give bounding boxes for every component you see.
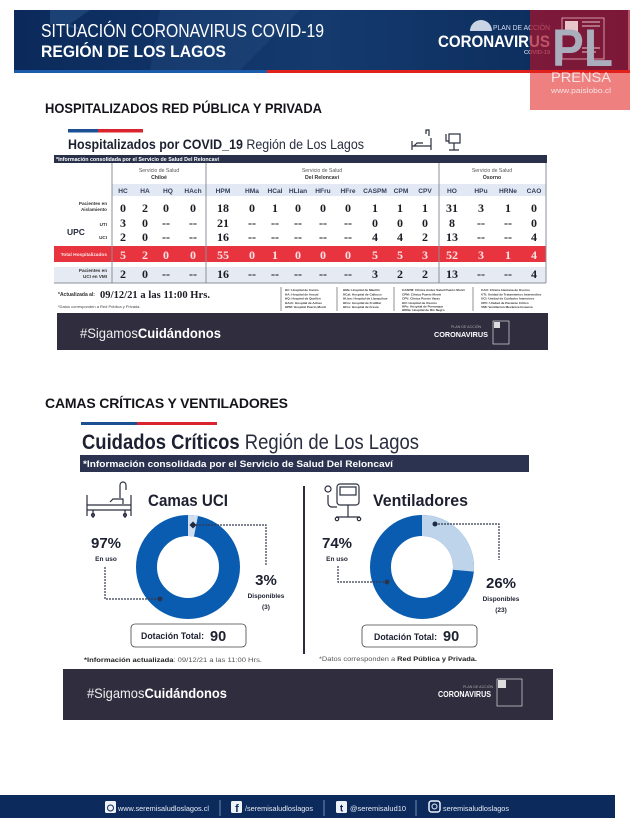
row: UCI: 4 xyxy=(372,230,378,244)
service names: Servicio de Salud xyxy=(472,168,512,174)
column codes: HO xyxy=(447,188,457,195)
row: UTI: -- xyxy=(271,216,279,230)
row: aislamiento: 0 xyxy=(320,201,326,215)
banner: Sigamos Cuidándonos (upper): PLAN DE ACCIÓN xyxy=(451,324,482,329)
footer link: twitter: @seremisalud10 xyxy=(350,804,406,813)
row: UCI: -- xyxy=(319,230,327,244)
row labels xyxy=(79,201,107,240)
row: total: 3 xyxy=(422,248,428,262)
row: VMI: -- xyxy=(271,267,279,281)
column codes: HLlan xyxy=(289,188,307,195)
flag bar xyxy=(81,422,217,425)
icon: ventilator xyxy=(325,484,361,521)
panel title: Cuidados Críticos Región de Los Lagos xyxy=(82,431,419,454)
VMI row background xyxy=(54,267,546,282)
row: UTI: -- xyxy=(477,216,485,230)
icon: ventilator xyxy=(446,134,460,150)
banner: Sigamos Cuidándonos (upper): #SigamosCuidándonos xyxy=(80,326,221,341)
stat: 97 en uso xyxy=(91,535,121,563)
legend of abbreviations: HPu: Hospital de Purranque xyxy=(402,304,443,308)
legend of abbreviations: HCal: Hospital de Calbuco xyxy=(343,292,382,296)
footer link: facebook xyxy=(231,801,313,815)
stat: 74 en uso xyxy=(322,535,352,563)
row: total: 5 xyxy=(372,248,378,262)
row: total: 52 xyxy=(446,248,458,262)
row: aislamiento: 0 xyxy=(120,201,126,215)
icon: hospital bed xyxy=(87,482,131,518)
banner: Sigamos Cuidándonos (lower): PLAN DE ACCIÓN xyxy=(463,684,494,689)
row: VMI: -- xyxy=(162,267,170,281)
box: dotacion total right: Dotación Total: xyxy=(374,632,437,642)
header logo: COVID-19 xyxy=(524,50,550,56)
legend of abbreviations: HFru: Hospital de Frutillar xyxy=(343,301,382,305)
row: UTI: 3 xyxy=(120,216,126,230)
legend of abbreviations: CAO: Clínica Alemana de Osorno xyxy=(481,288,530,292)
footer link: twitter xyxy=(336,801,406,814)
row: UTI: 0 xyxy=(142,216,148,230)
heading: hospitalizados: HOSPITALIZADOS RED PÚBLICA Y PRIVADA xyxy=(45,99,322,116)
row: total: 5 xyxy=(120,248,126,262)
table title: Hospitalizados por COVID_19 Región de Los Lagos xyxy=(68,136,364,152)
row: UTI: -- xyxy=(248,216,256,230)
UPC label: UPC xyxy=(67,227,85,237)
header logo xyxy=(438,20,550,56)
row: UTI: 0 xyxy=(372,216,378,230)
row: aislamiento: 0 xyxy=(190,201,196,215)
panel: cuidados criticos xyxy=(80,422,529,664)
row: UTI: 8 xyxy=(449,216,455,230)
row: UCI: -- xyxy=(344,230,352,244)
icon: bed xyxy=(412,130,431,150)
stat: 97 en uso: En uso xyxy=(95,556,117,563)
header row background xyxy=(112,184,546,196)
row: UTI: -- xyxy=(162,216,170,230)
row: UCI xyxy=(120,230,537,244)
service names: Servicio de Salud xyxy=(139,168,179,174)
banner: Sigamos Cuidándonos (lower) xyxy=(63,669,553,720)
banner: Sigamos Cuidándonos (lower): #SigamosCuidándonos xyxy=(87,685,227,701)
vertical divider xyxy=(303,486,305,654)
column codes: CAO xyxy=(527,188,541,195)
footer link: facebook: /seremisaludloslagos xyxy=(245,804,313,813)
column codes: HQ xyxy=(163,188,173,195)
row: VMI: 2 xyxy=(422,267,428,281)
footer link: web: www.seremisaludloslagos.cl xyxy=(117,804,209,813)
legend of abbreviations: HA: Hospital de Ancud xyxy=(285,292,319,296)
header banner xyxy=(14,10,628,73)
row: total: 0 xyxy=(295,248,301,262)
row: aislamiento: 0 xyxy=(531,201,537,215)
info bar: *Información consolidada por el Servicio de Salud Del Reloncaví xyxy=(83,459,394,469)
row: VMI: -- xyxy=(344,267,352,281)
row: VMI: 13 xyxy=(446,267,458,281)
row: VMI: 2 xyxy=(397,267,403,281)
row: UCI: -- xyxy=(477,230,485,244)
column codes: HAch xyxy=(184,188,202,195)
table column dividers xyxy=(54,163,546,283)
info bar xyxy=(54,155,547,163)
row labels: UCI xyxy=(99,235,107,240)
row: VMI: 3 xyxy=(372,267,378,281)
update stamp: *Datos corresponden a Red Pública y Privada. xyxy=(58,304,140,309)
row: aislamiento: 0 xyxy=(163,201,169,215)
legend of abbreviations: VMI: Ventilación Mecánica Invasiva xyxy=(481,305,533,309)
panel: hospitalizados table xyxy=(54,129,547,312)
row: total: 0 xyxy=(320,248,326,262)
legend of abbreviations: UCI: Unidad de Cuidados Intensivos xyxy=(481,297,535,301)
legend of abbreviations: HFre: Hospital de Fresia xyxy=(343,305,379,309)
box: dotacion total left: 90 xyxy=(210,629,226,645)
box: dotacion total left xyxy=(131,624,246,647)
row: total: 4 xyxy=(531,248,537,262)
column codes: CASPM xyxy=(363,188,387,195)
row: aislamiento xyxy=(120,201,537,215)
column codes: HPu xyxy=(474,188,488,195)
service names: Chiloé xyxy=(151,175,167,181)
banner: Sigamos Cuidándonos (upper) xyxy=(57,313,548,350)
row: UCI: 16 xyxy=(217,230,229,244)
column codes: HFru xyxy=(315,188,331,195)
column codes: HFre xyxy=(340,188,356,195)
row: aislamiento: 0 xyxy=(295,201,301,215)
row: total: 0 xyxy=(163,248,169,262)
legend of abbreviations xyxy=(281,287,542,312)
legend of abbreviations: HC: Hospital de Castro xyxy=(285,288,319,292)
column codes: HPM xyxy=(216,188,231,195)
banner: Sigamos Cuidándonos (upper): CORONAVIRUS xyxy=(434,330,488,339)
stat: 97 en uso: 97% xyxy=(91,535,121,552)
row: aislamiento: 1 xyxy=(372,201,378,215)
watermark: PL Prensa xyxy=(530,10,630,110)
row: total: 0 xyxy=(345,248,351,262)
column codes: CPV xyxy=(418,188,432,195)
legend of abbreviations: HO: Hospital de Osorno xyxy=(402,301,437,305)
row: aislamiento: 1 xyxy=(272,201,278,215)
row: aislamiento: 1 xyxy=(505,201,511,215)
column codes xyxy=(118,188,541,195)
row: UTI: -- xyxy=(294,216,302,230)
row: UCI: -- xyxy=(294,230,302,244)
total row label: Total Hospitalizados xyxy=(61,252,107,258)
header logo: PLAN DE ACCIÓN xyxy=(493,23,550,32)
row: VMI: -- xyxy=(189,267,197,281)
row: total: 0 xyxy=(249,248,255,262)
box: dotacion total right xyxy=(362,625,477,647)
legend of abbreviations: HAch: Hospital de Achao xyxy=(285,301,322,305)
row: UCI: 2 xyxy=(422,230,428,244)
row: aislamiento: 0 xyxy=(249,201,255,215)
stat: 26 disponibles: Disponibles xyxy=(483,596,520,603)
update stamp xyxy=(58,290,210,309)
watermark: PL Prensa: www.paislobo.cl xyxy=(550,86,611,95)
row: aislamiento: 1 xyxy=(397,201,403,215)
VMI row label: UCI en VMI xyxy=(83,274,107,279)
row: VMI: -- xyxy=(504,267,512,281)
footer link: instagram xyxy=(429,801,509,813)
row: UCI: -- xyxy=(248,230,256,244)
row: VMI: 4 xyxy=(531,267,537,281)
leader: uso right xyxy=(338,566,390,584)
service names: Del Reloncaví xyxy=(305,175,340,181)
row: UTI: 21 xyxy=(217,216,229,230)
legend of abbreviations: HPM: Hospital Puerto Montt xyxy=(285,305,326,309)
row: UCI: -- xyxy=(189,230,197,244)
stat: 3 disponibles: (3) xyxy=(262,604,270,611)
column codes: HRNe xyxy=(499,188,517,195)
label: camas UCI: Camas UCI xyxy=(148,491,228,510)
row: UCI: -- xyxy=(271,230,279,244)
total row background xyxy=(54,246,546,262)
stat: 26 disponibles: (23) xyxy=(495,607,507,614)
row: VMI: 0 xyxy=(142,267,148,281)
stat: 3 disponibles: Disponibles xyxy=(248,593,285,600)
header title: REGIÓN DE LOS LAGOS xyxy=(41,42,226,61)
row: UTI: 0 xyxy=(397,216,403,230)
footer link: twitter: t xyxy=(340,804,344,814)
row: aislamiento: 1 xyxy=(422,201,428,215)
banner: Sigamos Cuidándonos (lower): CORONAVIRUS xyxy=(438,690,491,699)
row: UCI: 2 xyxy=(120,230,126,244)
update stamp: 09/12/21 a las 11:00 Hrs. xyxy=(100,290,210,301)
row: total xyxy=(120,248,537,262)
box: dotacion total right: 90 xyxy=(443,629,459,645)
column codes: HC xyxy=(118,188,128,195)
watermark: PL Prensa: PL xyxy=(552,19,613,78)
leader: disponibles right xyxy=(432,522,499,560)
row: VMI: 16 xyxy=(217,267,229,281)
row: UTI xyxy=(120,216,537,230)
note: datos: *Datos corresponden a Red Pública y Privada. xyxy=(319,656,477,663)
row: UTI: -- xyxy=(189,216,197,230)
stat: 26 disponibles: 26% xyxy=(486,575,516,592)
row labels: UTI xyxy=(100,222,107,227)
heading: camas criticas: CAMAS CRÍTICAS Y VENTILADORES xyxy=(45,395,288,411)
stat: 74 en uso: 74% xyxy=(322,535,352,552)
stat: 3 disponibles: 3% xyxy=(255,572,277,589)
row: UTI: -- xyxy=(344,216,352,230)
header title xyxy=(41,20,324,61)
row labels: Aislamiento xyxy=(81,207,107,212)
flag bar xyxy=(68,129,143,132)
footer link: facebook: f xyxy=(235,803,239,815)
row: total: 5 xyxy=(397,248,403,262)
box: dotacion total left: Dotación Total: xyxy=(141,631,204,641)
legend of abbreviations: CPV: Clínica Puerto Varas xyxy=(402,297,440,301)
column codes: CPM xyxy=(394,188,409,195)
update stamp: *Actualizada al: xyxy=(58,292,95,298)
row: UTI: 0 xyxy=(422,216,428,230)
row: aislamiento: 0 xyxy=(345,201,351,215)
legend of abbreviations: HLlan: Hospital de Llanquihue xyxy=(343,297,388,301)
row: UTI: -- xyxy=(504,216,512,230)
watermark: PL Prensa: PRENSA xyxy=(551,69,612,85)
legend of abbreviations: HMa: Hospital de Maullín xyxy=(343,288,380,292)
VMI row label: Pacientes en xyxy=(79,268,107,273)
stat: 3 disponibles xyxy=(248,572,285,611)
row: aislamiento: 31 xyxy=(446,201,458,215)
row labels: Pacientes en xyxy=(79,201,107,206)
header title: SITUACIÓN CORONAVIRUS COVID-19 xyxy=(41,20,324,41)
legend of abbreviations: HRNe: Hospital de Río Negro xyxy=(402,308,445,312)
note: informacion actualizada: *Información actualizada : 09/12/21 a las 11:00 Hrs. xyxy=(84,657,262,664)
row: UCI: -- xyxy=(162,230,170,244)
legend of abbreviations: UPC: Unidad de Paciente Crítico xyxy=(481,301,529,305)
label: ventiladores: Ventiladores xyxy=(373,491,468,510)
footer link: instagram: seremisaludloslagos xyxy=(443,804,509,813)
row: VMI xyxy=(120,267,537,281)
row: total: 1 xyxy=(505,248,511,262)
row: UCI: 13 xyxy=(446,230,458,244)
row: total: 3 xyxy=(478,248,484,262)
row: VMI: 2 xyxy=(120,267,126,281)
row: aislamiento: 3 xyxy=(478,201,484,215)
VMI row label xyxy=(79,268,107,279)
info bar: *Información consolidada por el Servicio de Salud Del Reloncaví xyxy=(56,157,220,163)
donut: ventiladores xyxy=(380,526,464,608)
row: UCI: 0 xyxy=(142,230,148,244)
service names: Osorno xyxy=(483,175,501,181)
row: total: 55 xyxy=(217,248,229,262)
row: total: 0 xyxy=(190,248,196,262)
row: UTI: 0 xyxy=(531,216,537,230)
row: VMI: -- xyxy=(248,267,256,281)
row: aislamiento: 2 xyxy=(142,201,148,215)
footer link: web xyxy=(105,801,209,813)
row: UTI: -- xyxy=(319,216,327,230)
leader: uso left xyxy=(105,567,162,602)
legend of abbreviations: CPM: Clínica Puerto Montt xyxy=(402,292,441,296)
service names xyxy=(139,168,512,181)
legend of abbreviations: UTI: Unidad de Tratamientos Intermedios xyxy=(481,292,542,296)
column codes: HCal xyxy=(267,188,283,195)
column codes: HMa xyxy=(245,188,259,195)
donut: camas UCI xyxy=(146,526,230,608)
row: total: 2 xyxy=(142,248,148,262)
row: UCI: 4 xyxy=(397,230,403,244)
footer bar xyxy=(0,795,615,818)
info bar xyxy=(80,455,529,472)
stat: 74 en uso: En uso xyxy=(326,556,348,563)
legend of abbreviations: CASPM: Clínica Andes Salud Puerto Montt xyxy=(402,288,465,292)
header logo: CORONAVIRUS xyxy=(438,33,550,51)
row: VMI: -- xyxy=(477,267,485,281)
stat: 26 disponibles xyxy=(483,575,520,614)
row: total: 1 xyxy=(272,248,278,262)
leader: disponibles left xyxy=(189,521,266,565)
row: aislamiento: 18 xyxy=(217,201,229,215)
row: VMI: -- xyxy=(319,267,327,281)
service names: Servicio de Salud xyxy=(302,168,342,174)
legend of abbreviations: HQ: Hospital de Quellón xyxy=(285,297,321,301)
row: UCI: 4 xyxy=(531,230,537,244)
row: UCI: -- xyxy=(504,230,512,244)
row: VMI: -- xyxy=(294,267,302,281)
column codes: HA xyxy=(140,188,150,195)
